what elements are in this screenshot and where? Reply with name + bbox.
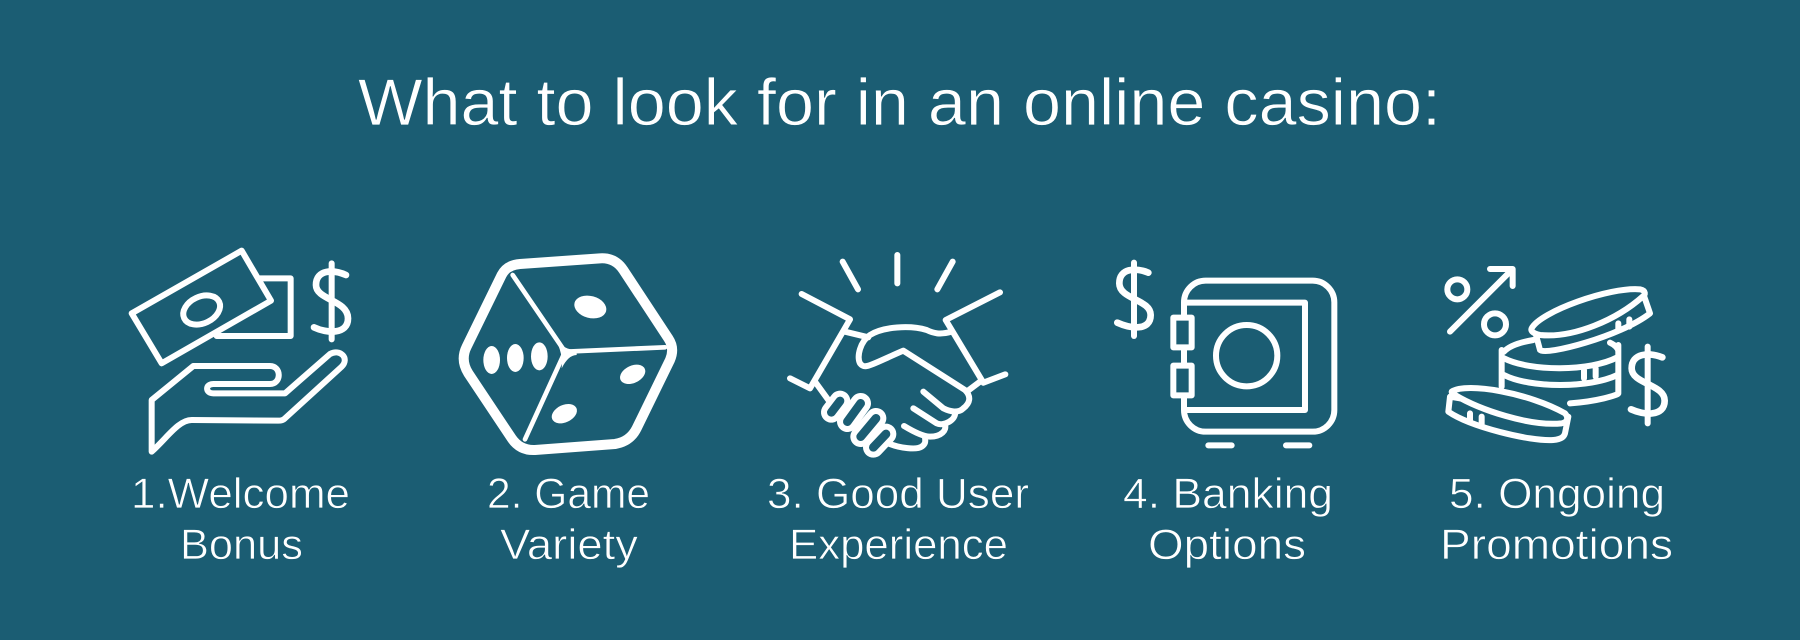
label: good user experience: Experience <box>789 521 1008 569</box>
label: good user experience: 3. Good User <box>767 470 1029 518</box>
label: welcome bonus: Bonus <box>180 521 303 569</box>
item 4: banking options <box>1117 263 1334 569</box>
label: ongoing promotions: 5. Ongoing <box>1449 470 1665 518</box>
label: banking options: Options <box>1148 521 1306 569</box>
item 3: good user experience <box>767 255 1029 569</box>
label: game variety <box>487 470 650 569</box>
label: banking options <box>1123 470 1333 569</box>
icon: money over open hand <box>132 251 348 452</box>
label: game variety: Variety <box>500 521 639 569</box>
item 1: welcome bonus <box>131 251 350 569</box>
label: banking options: 4. Banking <box>1123 470 1333 518</box>
label: ongoing promotions <box>1440 470 1673 569</box>
icon: handshake <box>790 255 1005 448</box>
icon: die <box>464 258 672 450</box>
title: What to look for in an online casino: <box>358 65 1441 139</box>
item 5: ongoing promotions <box>1440 269 1673 569</box>
label: good user experience <box>767 470 1029 569</box>
label: ongoing promotions: Promotions <box>1440 521 1673 569</box>
label: welcome bonus <box>131 470 350 569</box>
label: game variety: 2. Game <box>487 470 650 518</box>
icon: coins with percent and dollar <box>1447 269 1665 440</box>
item 2: game variety <box>464 258 672 569</box>
label: welcome bonus: 1.Welcome <box>131 470 350 518</box>
icon: safe with dollar <box>1117 263 1334 445</box>
